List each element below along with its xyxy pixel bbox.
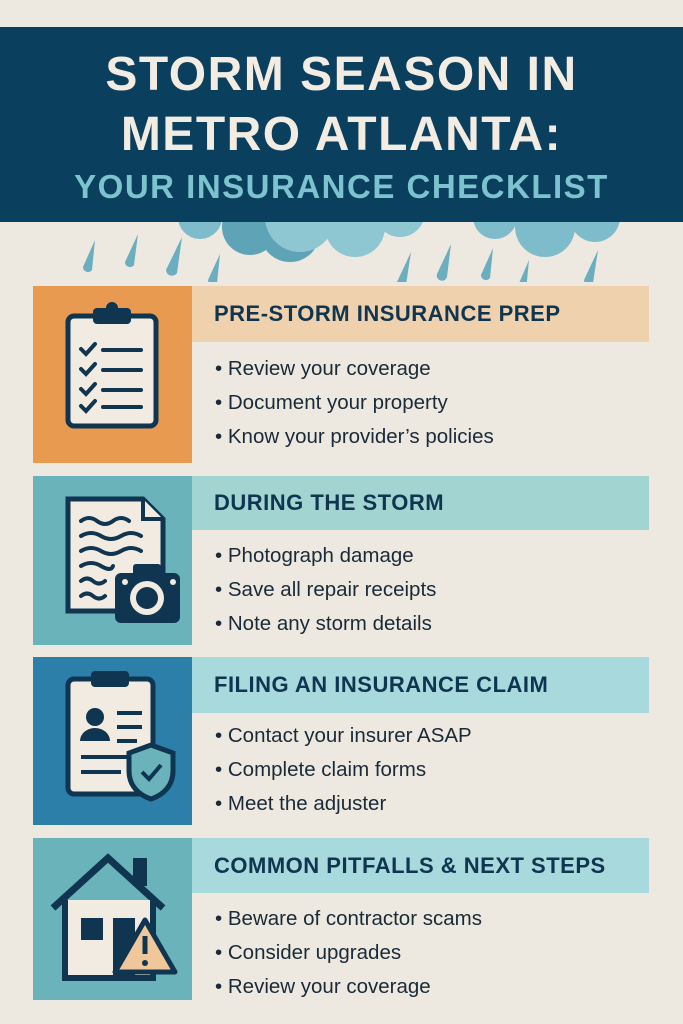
- bullets: • Meet the adjuster: [215, 792, 386, 815]
- heading: COMMON PITFALLS & NEXT STEPS: [214, 852, 606, 878]
- bullets: • Photograph damage: [215, 544, 414, 567]
- heading: [192, 476, 649, 530]
- heading: [192, 657, 649, 713]
- panel: pitfalls: [33, 838, 649, 1000]
- bullets: [215, 724, 472, 815]
- heading: PRE-STORM INSURANCE PREP: [214, 301, 561, 326]
- heading: FILING AN INSURANCE CLAIM: [214, 672, 548, 697]
- bullets: [215, 357, 494, 448]
- title line 2: METRO ATLANTA:: [121, 108, 562, 161]
- bullets: • Review your coverage: [215, 357, 431, 380]
- heading: [192, 286, 649, 342]
- bullets: • Review your coverage: [215, 975, 431, 998]
- bullets: • Contact your insurer ASAP: [215, 724, 472, 747]
- heading: [192, 838, 649, 893]
- bullets: [215, 544, 436, 635]
- bullets: • Know your provider’s policies: [215, 425, 494, 448]
- header banner: [0, 27, 683, 222]
- bullets: [215, 907, 482, 998]
- icon: clipboard checklist: [33, 286, 192, 463]
- bullets: • Complete claim forms: [215, 758, 426, 781]
- title line 1: STORM SEASON IN: [105, 48, 578, 101]
- panel: during the storm: [33, 476, 649, 645]
- icon: house with warning: [33, 838, 192, 1000]
- panel: pre-storm prep: [33, 286, 649, 463]
- bullets: • Beware of contractor scams: [215, 907, 482, 930]
- bullets: • Save all repair receipts: [215, 578, 436, 601]
- bullets: • Note any storm details: [215, 612, 432, 635]
- icon: document and camera: [33, 476, 192, 645]
- heading: DURING THE STORM: [214, 490, 444, 515]
- bullets: • Consider upgrades: [215, 941, 401, 964]
- cloud and rain: [83, 222, 620, 282]
- icon: claim form with shield: [33, 657, 192, 825]
- panel: filing a claim: [33, 657, 649, 825]
- bullets: • Document your property: [215, 391, 448, 414]
- subtitle: YOUR INSURANCE CHECKLIST: [74, 168, 609, 205]
